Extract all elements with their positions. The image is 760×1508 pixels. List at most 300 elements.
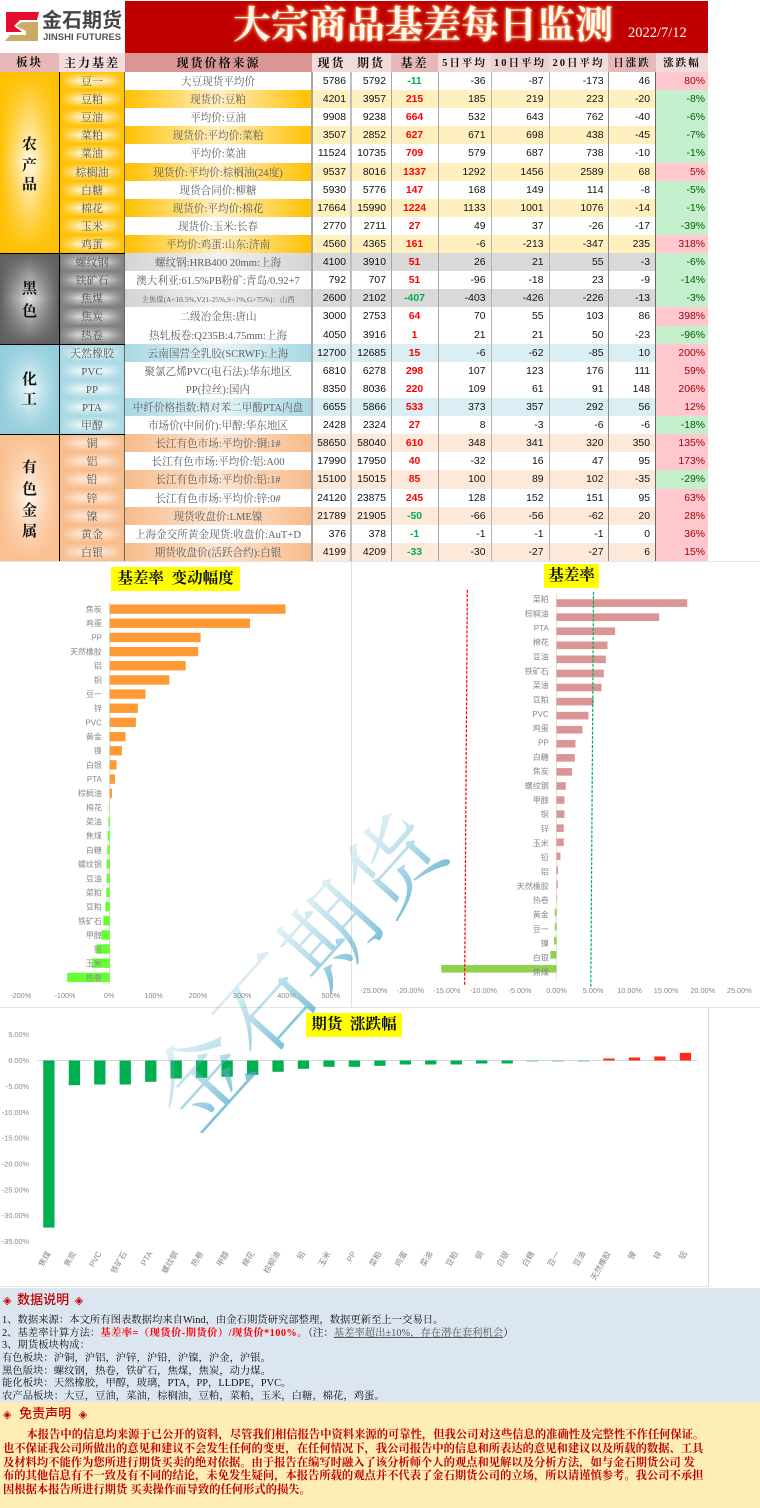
row: 豆一: -11 bbox=[407, 76, 422, 87]
row: 焦煤: 2600 bbox=[323, 293, 346, 304]
sector: ferrous: 黑 bbox=[22, 281, 37, 297]
row: 豆粕: 223 bbox=[586, 94, 604, 105]
row: 白糖: 5776 bbox=[363, 185, 386, 196]
row: 镍: 28% bbox=[684, 511, 705, 522]
panel: futures change chart: 甲醇 bbox=[214, 1249, 231, 1268]
panel: basis rate chart: 豆粕 bbox=[533, 694, 549, 704]
sector: non-ferrous metals: 属 bbox=[22, 524, 37, 540]
row: 白银: 15% bbox=[684, 547, 705, 558]
row: PP: 206% bbox=[678, 384, 705, 395]
panel: basis rate change chart: 400% bbox=[277, 991, 296, 1000]
panel: futures change chart: 豆油 bbox=[571, 1249, 587, 1268]
row: 豆油: 643 bbox=[526, 112, 544, 123]
panel: futures change chart: -25.00% bbox=[2, 1185, 30, 1194]
row: 焦煤: 主焦煤(A<10.5%,V21-25%,S<1%,G>75%)：山西 bbox=[141, 295, 295, 304]
row: 豆一: -173 bbox=[583, 76, 604, 87]
row: PTA: 12% bbox=[684, 402, 705, 413]
row: 鸡蛋: -347 bbox=[583, 239, 604, 250]
row: 铁矿石: -18 bbox=[528, 275, 544, 286]
panel: basis rate chart: 天然橡胶 bbox=[517, 881, 549, 891]
panel: basis rate change chart: -100% bbox=[55, 991, 76, 1000]
row: 棉花: 1224 bbox=[403, 203, 426, 214]
row: 豆粕: 3957 bbox=[363, 94, 386, 105]
row: 螺纹钢: 螺纹钢:HRB400 20mm:上海 bbox=[155, 258, 281, 269]
row: 豆油 bbox=[60, 108, 708, 126]
panel: futures change chart: -5.00% bbox=[6, 1082, 30, 1091]
text: data notes body: 2、基差率计算方法：基差率=（现货价-期货价）/现货价*100%。（注：基差率超出±10%，存在潜在套利机会） bbox=[2, 1328, 514, 1338]
row: 焦煤 bbox=[60, 289, 708, 307]
row: 豆一 bbox=[60, 72, 708, 90]
row: 菜油: -10 bbox=[635, 148, 650, 159]
table header: 板块 bbox=[16, 57, 43, 69]
panel: basis rate change chart: 镍 bbox=[94, 746, 102, 756]
row: 焦煤: 焦煤 bbox=[81, 293, 103, 305]
row: 焦煤: -226 bbox=[583, 293, 604, 304]
panel: basis rate change chart: 热卷 bbox=[86, 972, 102, 982]
panel: basis rate change chart: 豆油 bbox=[86, 873, 102, 883]
row: 菜油: 平均价:菜油 bbox=[190, 149, 246, 160]
row: 豆粕: 现货价:豆粕 bbox=[190, 95, 246, 106]
row: 鸡蛋: 平均价:鸡蛋:山东:济南 bbox=[166, 240, 270, 251]
panel: basis rate chart: 20.00% bbox=[690, 986, 716, 995]
panel: basis rate chart: 5.00% bbox=[583, 986, 604, 995]
row: 白糖: 168 bbox=[468, 185, 486, 196]
row: 白银: -33 bbox=[407, 547, 422, 558]
row: 焦炭: 86 bbox=[638, 311, 650, 322]
panel: basis rate chart: -5.00% bbox=[508, 986, 532, 995]
panel: basis rate change chart: PP bbox=[91, 633, 102, 642]
row: PVC: 59% bbox=[684, 366, 705, 377]
panel: basis rate chart: 焦炭 bbox=[533, 766, 549, 776]
table header: 5日平均 bbox=[442, 58, 487, 69]
row: 白糖: 现货合同价:柳糖 bbox=[179, 186, 257, 197]
row: 棉花: -1% bbox=[687, 203, 705, 214]
row: 天然橡胶: 200% bbox=[678, 348, 705, 359]
row: 锌: 151 bbox=[586, 493, 604, 504]
row: 螺纹钢: 3910 bbox=[363, 257, 386, 268]
row: PP: 61 bbox=[532, 384, 544, 395]
sector: ferrous bbox=[0, 253, 59, 344]
row: 菜粕: -45 bbox=[635, 130, 650, 141]
row: 菜粕: 438 bbox=[586, 130, 604, 141]
row: 铅: 102 bbox=[586, 474, 604, 485]
logo: Jinshi Futures: 金石期货 bbox=[42, 10, 122, 32]
panel: basis rate chart: -10.00% bbox=[470, 986, 498, 995]
panel: futures change chart: -15.00% bbox=[2, 1134, 30, 1143]
row: 焦煤: -13 bbox=[635, 293, 650, 304]
row: 镍: 21789 bbox=[317, 511, 346, 522]
row: 豆粕 bbox=[60, 90, 708, 108]
row: 棕榈油: 68 bbox=[638, 167, 650, 178]
row: 豆一: 豆一 bbox=[81, 76, 103, 88]
row: 棕榈油: 棕榈油 bbox=[76, 167, 108, 179]
panel: futures change chart: 豆一 bbox=[546, 1250, 562, 1268]
panel: futures change chart: 螺纹钢 bbox=[159, 1249, 180, 1275]
panel: basis rate change chart: 白银 bbox=[86, 760, 102, 770]
row: 白糖: -8 bbox=[641, 185, 650, 196]
row: PVC: 298 bbox=[406, 366, 423, 377]
panel: basis rate change chart: 500% bbox=[322, 991, 341, 1000]
row: 镍: -56 bbox=[528, 511, 544, 522]
row: 天然橡胶: -6 bbox=[476, 348, 486, 359]
row: 镍: -66 bbox=[470, 511, 486, 522]
row: PP: 8350 bbox=[323, 384, 346, 395]
panel: basis rate chart: 锌 bbox=[541, 823, 549, 833]
row: 菜粕: 698 bbox=[526, 130, 544, 141]
heading: data notes: ◈ 数据说明 ◈ bbox=[3, 1292, 83, 1307]
row: 焦煤: 2102 bbox=[363, 293, 386, 304]
panel: futures change chart: 白糖 bbox=[520, 1249, 536, 1268]
heading: disclaimer: ◈ 免责声明 ◈ bbox=[3, 1406, 87, 1421]
row: 鸡蛋 bbox=[60, 235, 708, 253]
row: 白糖: 149 bbox=[526, 185, 544, 196]
row: 铝: 40 bbox=[409, 456, 420, 467]
row: 鸡蛋: 4365 bbox=[363, 239, 386, 250]
table header: 主力基差 bbox=[64, 56, 120, 70]
row: 白糖: 5930 bbox=[323, 185, 346, 196]
row: 豆粕: -8% bbox=[687, 94, 705, 105]
panel: basis rate chart: 黄金 bbox=[533, 909, 549, 919]
logo: Jinshi Futures: JINSHI FUTURES bbox=[43, 32, 121, 43]
heading: basis rate change bbox=[111, 567, 240, 591]
row: 锌: 128 bbox=[468, 493, 486, 504]
row: PVC: 176 bbox=[586, 366, 604, 377]
panel: futures change chart: 菜粕 bbox=[367, 1249, 384, 1268]
row: 鸡蛋: 161 bbox=[406, 239, 423, 250]
table header: 涨跌幅 bbox=[663, 58, 701, 69]
row: 棕榈油: 1292 bbox=[462, 167, 486, 178]
row: 锌: 23875 bbox=[357, 493, 386, 504]
row: 镍: 20 bbox=[638, 511, 650, 522]
row: PP bbox=[60, 380, 708, 398]
row: 菜粕: 627 bbox=[406, 130, 423, 141]
panel: futures change chart: -30.00% bbox=[2, 1211, 30, 1220]
text: data notes body: 农产品板块：大豆，豆油，菜油，棕榈油，豆粕，菜粕，玉米，白糖，棉花，鸡蛋。 bbox=[2, 1390, 385, 1402]
row: 白银 bbox=[60, 543, 708, 561]
row: 黄金: 上海金交所黄金现货:收盘价:AuT+D bbox=[135, 530, 301, 541]
panel: futures change chart: 天然橡胶 bbox=[588, 1249, 613, 1282]
row: 热卷 bbox=[60, 326, 708, 344]
panel: basis rate chart: PP bbox=[538, 738, 549, 747]
sector: non-ferrous metals: 有 bbox=[22, 460, 37, 476]
row: 玉米: -26 bbox=[588, 221, 604, 232]
row: 菜油: 10735 bbox=[357, 148, 386, 159]
row: 铁矿石: -96 bbox=[470, 275, 486, 286]
row: 鸡蛋: -6 bbox=[476, 239, 486, 250]
panel: basis rate chart: 鸡蛋 bbox=[533, 723, 549, 733]
panel: futures change chart: -35.00% bbox=[2, 1237, 30, 1246]
row: 锌 bbox=[60, 489, 708, 507]
panel: basis rate change chart: 300% bbox=[233, 991, 252, 1000]
row: 豆一: -87 bbox=[528, 76, 544, 87]
row: 甲醇: 8 bbox=[480, 420, 486, 431]
row: 天然橡胶: 15 bbox=[409, 348, 420, 359]
panel: basis rate change chart: 白糖 bbox=[86, 845, 102, 855]
row: 铝: 长江有色市场:平均价:铝:A00 bbox=[151, 457, 284, 468]
row: 焦煤: -407 bbox=[404, 293, 425, 304]
row: 铅: 15015 bbox=[357, 474, 386, 485]
row: 豆一: -36 bbox=[470, 76, 486, 87]
row: 白糖 bbox=[60, 181, 708, 199]
row: 甲醇 bbox=[60, 416, 708, 434]
date: 2022/7/12 bbox=[628, 25, 687, 41]
sector: non-ferrous metals: 色 bbox=[22, 482, 37, 498]
row: 焦炭: 55 bbox=[532, 311, 544, 322]
panel: futures change chart: 铜 bbox=[473, 1249, 485, 1261]
row: 棕榈油: 5% bbox=[690, 167, 705, 178]
row: 铜: 341 bbox=[526, 438, 544, 449]
panel: basis rate change chart: 棕榈油 bbox=[78, 788, 102, 798]
row: 甲醇: 甲醇 bbox=[81, 420, 103, 432]
panel: futures change chart: 锌 bbox=[651, 1249, 664, 1261]
panel: futures change chart: 豆粕 bbox=[443, 1249, 460, 1268]
row: 锌: 24120 bbox=[317, 493, 346, 504]
row: 豆油: 762 bbox=[586, 112, 604, 123]
row: 焦炭: 103 bbox=[586, 311, 604, 322]
row: 锌: 长江有色市场:平均价:锌:0# bbox=[155, 494, 281, 505]
panel: data notes bbox=[0, 1288, 760, 1402]
row: 镍: -62 bbox=[588, 511, 604, 522]
panel: basis rate chart: 菜油 bbox=[533, 680, 549, 690]
row: 玉米: 37 bbox=[532, 221, 544, 232]
row: 黄金: 378 bbox=[369, 529, 386, 540]
row: 铅: 100 bbox=[468, 474, 486, 485]
panel: basis rate chart: 豆油 bbox=[533, 651, 549, 661]
row: 锌: 63% bbox=[684, 493, 705, 504]
row: 黄金: -1 bbox=[410, 529, 419, 540]
row: 黄金: -1 bbox=[594, 529, 604, 540]
panel: futures change chart: 焦炭 bbox=[61, 1249, 78, 1268]
row: 天然橡胶: 12685 bbox=[357, 348, 386, 359]
row: 白糖: 白糖 bbox=[81, 185, 103, 197]
sector: agriculture: 产 bbox=[22, 158, 37, 174]
sector: chemicals: 化 bbox=[22, 372, 37, 388]
row: 铁矿石: 707 bbox=[369, 275, 386, 286]
row: 黄金: 0 bbox=[644, 529, 650, 540]
row: 白银: 期货收盘价(活跃合约):白银 bbox=[155, 548, 281, 559]
panel: basis rate change chart: 豆一 bbox=[86, 690, 102, 699]
row: 热卷: 21 bbox=[532, 330, 544, 341]
row: 锌: 锌 bbox=[86, 493, 98, 505]
panel: basis rate chart bbox=[351, 561, 760, 1008]
row: 玉米 bbox=[60, 217, 708, 235]
panel: basis rate change chart: 螺纹钢 bbox=[78, 859, 102, 869]
row: 铝: 17950 bbox=[357, 456, 386, 467]
row: PP: PP bbox=[86, 384, 98, 396]
row: 棉花: 1001 bbox=[520, 203, 544, 214]
row: 天然橡胶: 10 bbox=[638, 348, 650, 359]
row: 豆油: 532 bbox=[468, 112, 486, 123]
row: 黄金: -1 bbox=[534, 529, 544, 540]
panel: basis rate chart: 白糖 bbox=[533, 752, 549, 762]
row: 菜油: -1% bbox=[687, 148, 705, 159]
row: 热卷: 热卷 bbox=[81, 330, 103, 342]
panel: basis rate chart: -25.00% bbox=[360, 986, 388, 995]
row: 甲醇: 2428 bbox=[323, 420, 346, 431]
row: 豆一: 5792 bbox=[363, 76, 386, 87]
row: 玉米: 现货价:玉米:长春 bbox=[178, 222, 258, 233]
heading: basis rate change: 基差率 变动幅度 bbox=[117, 570, 234, 587]
row: 热卷: 21 bbox=[474, 330, 486, 341]
panel: basis rate chart: 豆一 bbox=[533, 925, 549, 934]
table header: 期货 bbox=[357, 56, 385, 70]
row: 菜粕 bbox=[60, 126, 708, 144]
row: 白银: -27 bbox=[528, 547, 544, 558]
row: 菜粕: 671 bbox=[468, 130, 486, 141]
sector: agriculture bbox=[0, 72, 59, 253]
row: 螺纹钢: -6% bbox=[687, 257, 705, 268]
logo: Jinshi Futures bbox=[0, 0, 125, 53]
row: 棕榈油 bbox=[60, 163, 708, 181]
row: 焦炭: 3000 bbox=[323, 311, 346, 322]
heading: basis rate: 基差率 bbox=[548, 567, 595, 584]
row: 菜粕: 菜粕 bbox=[81, 130, 103, 142]
text: disclaimer body: 因根据本报告所进行期货 买卖操作而导致的任何形式的损失。 bbox=[3, 1484, 311, 1496]
panel: basis rate chart: 铁矿石 bbox=[525, 666, 549, 676]
row: 甲醇: 市场价(中间价):甲醇:华东地区 bbox=[148, 421, 288, 432]
row: 铝 bbox=[60, 452, 708, 470]
row: 甲醇: -3 bbox=[534, 420, 544, 431]
panel: futures change chart: PP bbox=[345, 1250, 358, 1264]
row: 铜: 320 bbox=[586, 438, 604, 449]
panel: basis rate change chart: 0% bbox=[104, 991, 115, 1000]
row: 螺纹钢: 26 bbox=[474, 257, 486, 268]
panel: basis rate chart: 菜粕 bbox=[533, 594, 549, 604]
row: 棕榈油: 1337 bbox=[403, 167, 426, 178]
row: 黄金: 黄金 bbox=[81, 529, 103, 541]
panel: basis rate change chart: 铁矿石 bbox=[78, 916, 102, 926]
row: 白糖: 114 bbox=[587, 185, 604, 196]
panel: futures change chart: -20.00% bbox=[2, 1159, 30, 1168]
row: 棉花: 棉花 bbox=[81, 203, 103, 215]
row: 天然橡胶 bbox=[60, 344, 708, 362]
row: 豆油: 9908 bbox=[323, 112, 346, 123]
panel: futures change chart: 0.00% bbox=[8, 1056, 30, 1065]
table header bbox=[0, 53, 708, 72]
row: 铅: -29% bbox=[681, 474, 705, 485]
row: 锌: 152 bbox=[526, 493, 544, 504]
row: 天然橡胶: -62 bbox=[528, 348, 544, 359]
row: 甲醇: -6 bbox=[641, 420, 650, 431]
row: 菜油: 709 bbox=[406, 148, 423, 159]
title banner bbox=[125, 1, 708, 53]
row: 铁矿石: 51 bbox=[409, 275, 420, 286]
panel: basis rate change chart: 菜粕 bbox=[86, 887, 102, 897]
panel: basis rate change chart: 菜油 bbox=[86, 817, 102, 827]
row: 棉花: 1133 bbox=[463, 203, 486, 214]
row: 玉米: -17 bbox=[635, 221, 650, 232]
panel: futures change chart: 菜油 bbox=[418, 1249, 435, 1268]
row: 镍: 镍 bbox=[86, 511, 98, 523]
row: 白银: 白银 bbox=[81, 547, 103, 559]
heading: basis rate bbox=[544, 564, 599, 588]
row: PVC: 107 bbox=[468, 366, 486, 377]
row: PP: 220 bbox=[406, 384, 423, 395]
row: 鸡蛋: 鸡蛋 bbox=[81, 239, 103, 251]
sector: agriculture: 品 bbox=[22, 177, 37, 193]
row: 铜: 350 bbox=[633, 438, 650, 449]
row: 鸡蛋: 318% bbox=[678, 239, 705, 250]
row: 黄金: 36% bbox=[684, 529, 705, 540]
row: PP: 109 bbox=[468, 384, 486, 395]
panel: basis rate chart: PTA bbox=[534, 624, 549, 633]
row: 黄金: -1 bbox=[476, 529, 486, 540]
panel: futures change chart: -10.00% bbox=[2, 1108, 30, 1117]
row: 铜: 58650 bbox=[317, 438, 346, 449]
row: 铅: 长江有色市场:平均价:铅:1# bbox=[155, 475, 281, 486]
panel: futures change chart: 棕榈油 bbox=[261, 1249, 282, 1275]
row: 螺纹钢 bbox=[60, 253, 708, 271]
row: 铁矿石 bbox=[60, 271, 708, 289]
row: 镍: -50 bbox=[407, 511, 422, 522]
row: 铝: 16 bbox=[532, 456, 544, 467]
text: disclaimer body: 也不保证我公司所做出的意见和建议不会发生任何的变更，在任何情况下，我公司报告中的信息和所表达的意见和建议以及所载的数据、工具 bbox=[3, 1443, 703, 1455]
panel: basis rate change chart: 铅 bbox=[94, 944, 102, 954]
row: 铜: 348 bbox=[468, 438, 486, 449]
sector: non-ferrous metals: 金 bbox=[22, 503, 37, 519]
row: 玉米: 27 bbox=[409, 221, 420, 232]
row: PP: 148 bbox=[633, 384, 650, 395]
panel: basis rate chart: 铝 bbox=[541, 867, 549, 877]
row: 铅: 铅 bbox=[86, 474, 98, 486]
row: 铅: 85 bbox=[409, 474, 420, 485]
text: disclaimer body: 本报告中的信息均来源于已公开的资料，尽管我们相信报告中资料来源的可靠性，但我公司对这些信息的准确性及完整性不作任何保证。 bbox=[26, 1429, 704, 1441]
row: 天然橡胶: 云南国营全乳胶(SCRWF):上海 bbox=[148, 349, 288, 360]
row: PVC bbox=[60, 362, 708, 380]
row: 螺纹钢: 4100 bbox=[323, 257, 346, 268]
row: 棕榈油: 2589 bbox=[580, 167, 604, 178]
row: 铝: 铝 bbox=[86, 456, 98, 468]
panel: futures change chart: 热卷 bbox=[189, 1249, 205, 1268]
row: 鸡蛋: 235 bbox=[633, 239, 650, 250]
row: PVC: 123 bbox=[526, 366, 544, 377]
row: 豆一: 46 bbox=[638, 76, 650, 87]
panel: basis rate chart: 0.00% bbox=[546, 986, 567, 995]
panel: basis rate change chart: 焦煤 bbox=[86, 831, 102, 841]
row: 热卷: 热轧板卷:Q235B:4.75mm:上海 bbox=[149, 331, 287, 342]
sector: ferrous: 色 bbox=[22, 304, 37, 320]
row: 玉米: 49 bbox=[474, 221, 486, 232]
row: 螺纹钢: 螺纹钢 bbox=[76, 257, 108, 269]
row: PTA: 373 bbox=[468, 402, 486, 413]
panel: basis rate chart: 25.00% bbox=[727, 986, 752, 995]
table header: 现货 bbox=[317, 56, 346, 70]
row: 铝: 95 bbox=[638, 456, 650, 467]
row: PTA: 6655 bbox=[323, 402, 346, 413]
row: PTA: 533 bbox=[406, 402, 423, 413]
text: data notes body: 能化板块：天然橡胶，甲醇，玻璃，PTA，PP，LLDPE，PVC。 bbox=[2, 1378, 291, 1389]
row: 白糖: -5% bbox=[687, 185, 705, 196]
panel: basis rate change chart: 豆粕 bbox=[86, 902, 102, 912]
row: PP: 8036 bbox=[363, 384, 386, 395]
row: PTA: 357 bbox=[526, 402, 544, 413]
row: 焦煤: -403 bbox=[465, 293, 486, 304]
row: 焦炭: 64 bbox=[409, 311, 420, 322]
panel: basis rate change chart bbox=[0, 561, 351, 1008]
row: 天然橡胶: 12700 bbox=[317, 348, 346, 359]
table header: 基差 bbox=[400, 56, 428, 70]
row: 豆粕: -20 bbox=[635, 94, 650, 105]
row: 镍: 现货收盘价:LME镍 bbox=[174, 512, 262, 523]
row: 铝: 47 bbox=[592, 456, 604, 467]
row: 焦炭: 70 bbox=[474, 311, 486, 322]
panel: basis rate change chart: 铜 bbox=[94, 675, 102, 685]
row: 菜油: 菜油 bbox=[81, 148, 103, 160]
row: 菜油: 579 bbox=[468, 148, 486, 159]
panel: futures change chart: 玉米 bbox=[316, 1249, 333, 1268]
row: PTA bbox=[60, 398, 708, 416]
row: 黄金: 376 bbox=[329, 529, 346, 540]
